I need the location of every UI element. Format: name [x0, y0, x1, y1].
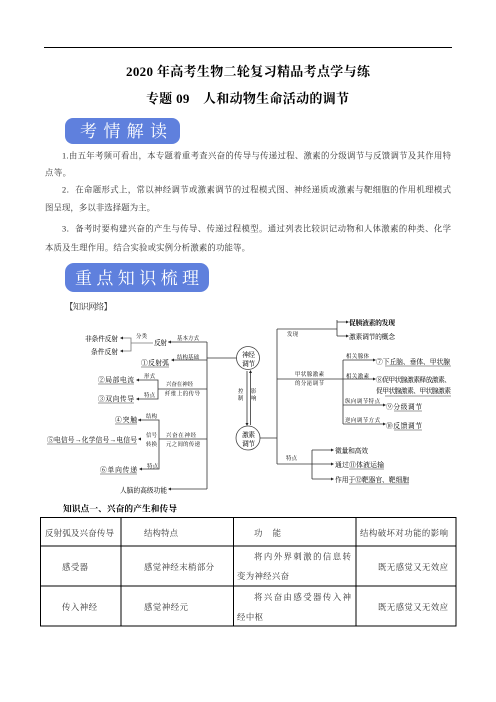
- text block: exam analysis points: [45, 150, 452, 252]
- left branch: nerve regulation: 信号: [146, 431, 158, 439]
- table row: receptor: 感觉神经末梢部分: [144, 562, 215, 572]
- text block: exam analysis points: 1.由五年考频可看出，本专题着重考查兴奋的传导与传递过程、激素的分级调节与反馈调节及其作用特: [62, 150, 452, 162]
- center nodes: nerve and hormone regulation: 控: [238, 387, 244, 395]
- table row: afferent nerve: 既无感觉又无效应: [378, 602, 449, 612]
- left branch: nerve regulation: 转换: [146, 440, 158, 448]
- center nodes: nerve and hormone regulation: 响: [251, 394, 257, 402]
- table header row: [45, 528, 449, 538]
- title: 专题 09 人和动物生命活动的调节: [146, 91, 349, 106]
- right branch: hormone regulation: 微量和高效: [335, 446, 368, 455]
- left branch: nerve regulation: 特点: [147, 462, 159, 470]
- center nodes: nerve and hormone regulation: 调节: [242, 359, 255, 368]
- right branch: hormone regulation: ⑧促甲状腺激素释放激素、: [376, 375, 451, 384]
- table row: afferent nerve: 感觉神经元: [144, 602, 189, 612]
- table row: receptor: 变为神经兴奋: [237, 571, 289, 581]
- left branch: nerve regulation: 基本方式: [177, 334, 200, 342]
- text block: exam analysis points: 2．在命题形式上，常以神经调节或激素调节的过程模式图、神经递质或激素与靶细胞的作用机理模式: [62, 184, 452, 196]
- table header row: 结构破坏对功能的影响: [360, 528, 449, 538]
- right branch: hormone regulation: 激素调节的概念: [349, 332, 395, 341]
- table: reflex arc structure and function: [40, 518, 456, 626]
- left branch: nerve regulation: 元之间的传递: [166, 440, 201, 448]
- table header row: 结构特点: [144, 528, 179, 538]
- left branch: nerve regulation: ①反射弧: [141, 358, 169, 367]
- title: [126, 64, 371, 106]
- table row: receptor: [62, 552, 449, 581]
- left branch: nerve regulation: 结构: [146, 412, 158, 420]
- table row: receptor: 既无感觉又无效应: [378, 562, 449, 572]
- left branch: nerve regulation: 分类: [136, 332, 148, 340]
- left branch: nerve regulation: ②局部电流: [98, 375, 134, 384]
- right branch: hormone regulation: 发现: [287, 330, 299, 338]
- center nodes: nerve and hormone regulation: 影: [251, 387, 257, 395]
- heading: knowledge point one: 知识点一、兴奋的产生和传导: [63, 502, 177, 514]
- right branch: hormone regulation: 相关腺体: [346, 352, 370, 360]
- text block: exam analysis points: 本质及生理作用。结合实验或实例分析激素的功能等。: [45, 242, 250, 252]
- right branch: hormone regulation: ⑩反馈调节: [386, 421, 422, 430]
- center nodes: nerve and hormone regulation: [236, 346, 260, 450]
- right branch: hormone regulation: 相关激素: [346, 372, 370, 380]
- table row: afferent nerve: [62, 592, 449, 622]
- center nodes: nerve and hormone regulation: 激素: [242, 430, 255, 439]
- concept map: [47, 318, 451, 494]
- right branch: hormone regulation: ⑨分级调节: [386, 402, 422, 411]
- center nodes: nerve and hormone regulation: 神经: [242, 350, 255, 359]
- left branch: nerve regulation: 反射: [154, 338, 167, 347]
- label: knowledge network: 【知识网络】: [65, 302, 112, 312]
- title: 2020 年高考生物二轮复习精品考点学与练: [126, 64, 371, 79]
- left branch: nerve regulation: 形式: [144, 372, 156, 380]
- table header row: 功 能: [254, 528, 281, 538]
- left branch: nerve regulation: 结构基础: [177, 353, 200, 361]
- left branch: nerve regulation: ⑥单向传递: [100, 465, 137, 474]
- left branch: nerve regulation: 兴奋在神经: [166, 380, 194, 388]
- left branch: nerve regulation: ⑤电信号→化学信号→电信号: [47, 435, 137, 444]
- text block: exam analysis points: 图呈现，多以非选择题为主。: [45, 202, 155, 214]
- table row: receptor: 感受器: [62, 562, 89, 572]
- table row: afferent nerve: 将兴奋由感受器传入神: [254, 592, 352, 602]
- text block: exam analysis points: 3．备考时要构建兴奋的产生与传导、传递过程模型。通过列表比较识记动物和人体激素的种类、化学: [62, 224, 452, 234]
- banner: exam analysis: 考情解读: [80, 117, 167, 142]
- right branch: hormone regulation: 的分泌调节: [295, 379, 325, 387]
- right branch: hormone regulation: 促胰液素的发现: [349, 318, 395, 327]
- right branch: hormone regulation: 甲状腺激素: [295, 370, 325, 378]
- left branch: nerve regulation: [47, 332, 237, 494]
- text block: exam analysis points: 点等。: [45, 168, 71, 178]
- right branch: hormone regulation: 特点: [286, 454, 298, 462]
- table row: afferent nerve: 经中枢: [237, 612, 264, 622]
- right branch: hormone regulation: 纵向调节特点: [345, 397, 381, 405]
- left branch: nerve regulation: 纤维上的传导: [165, 390, 201, 398]
- center nodes: nerve and hormone regulation: 制: [238, 394, 244, 402]
- right branch: hormone regulation: 逆向调节方式: [345, 416, 381, 424]
- left branch: nerve regulation: ④突触: [115, 415, 137, 424]
- right branch: hormone regulation: 通过⑪体液运输: [335, 460, 384, 469]
- right branch: hormone regulation: ⑦下丘脑、垂体、甲状腺: [376, 357, 450, 366]
- left branch: nerve regulation: ③双向传导: [98, 394, 134, 403]
- left branch: nerve regulation: 兴奋在神经: [166, 431, 197, 439]
- right branch: hormone regulation: 作用于⑫靶器官、靶细胞: [335, 475, 409, 484]
- center nodes: nerve and hormone regulation: 调节: [242, 439, 255, 448]
- right branch: hormone regulation: [260, 318, 451, 484]
- table row: receptor: 将内外界刺激的信息转: [254, 552, 352, 562]
- right branch: hormone regulation: 促甲状腺激素、甲状腺激素: [376, 386, 451, 395]
- left branch: nerve regulation: 条件反射: [91, 347, 118, 356]
- left branch: nerve regulation: 特点: [144, 391, 156, 399]
- table row: afferent nerve: 传入神经: [62, 602, 98, 612]
- left branch: nerve regulation: 人脑的高级功能: [120, 486, 167, 494]
- table header row: 反射弧及兴奋传导: [45, 528, 115, 538]
- left branch: nerve regulation: 非条件反射: [85, 334, 118, 343]
- banner: key knowledge: 重点知识梳理: [75, 264, 199, 289]
